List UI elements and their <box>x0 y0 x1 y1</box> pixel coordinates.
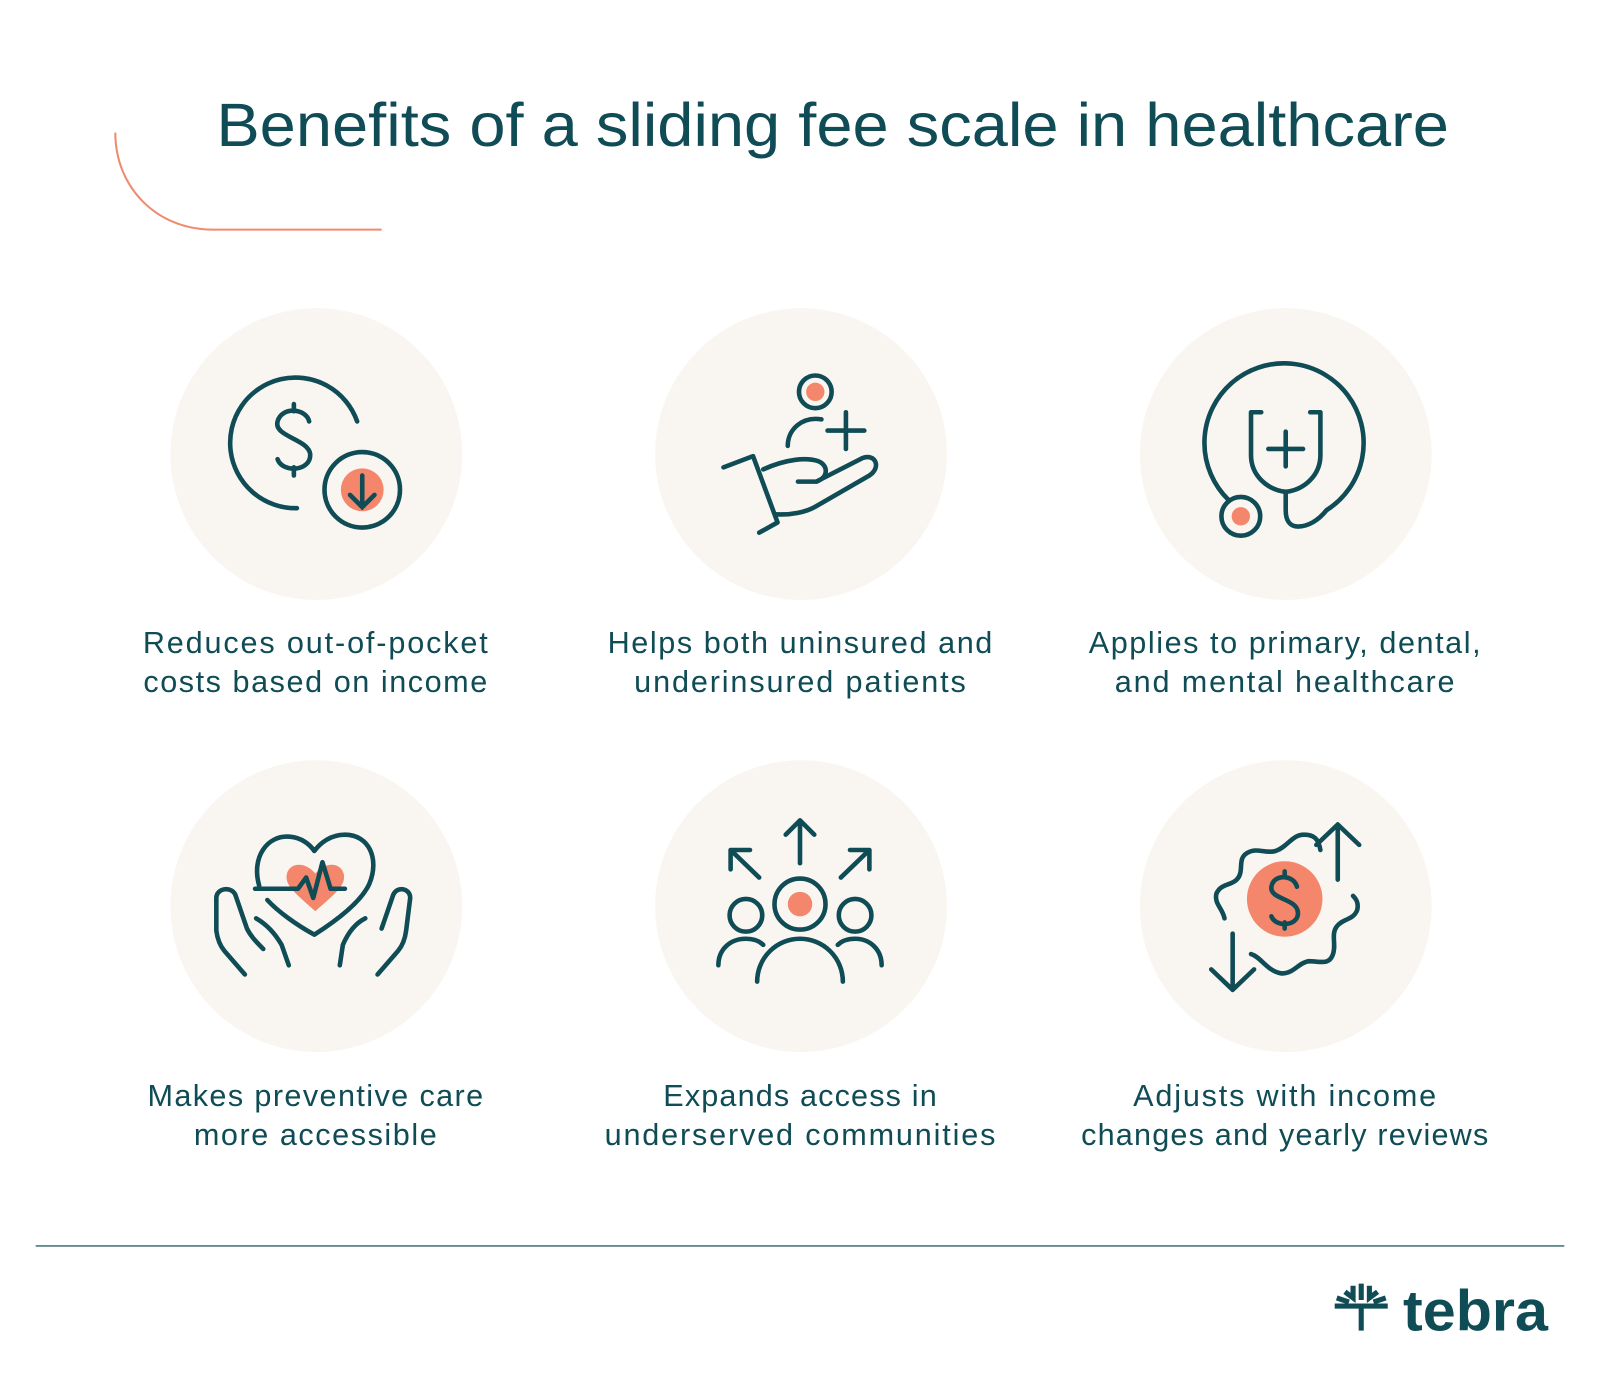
text: underserved communities <box>605 1118 995 1152</box>
panel: expands access <box>605 760 995 1152</box>
panel: adjusts with income <box>1081 760 1488 1152</box>
icon: community with arrows <box>718 820 882 982</box>
icon: gear dollar with arrows <box>1211 824 1359 990</box>
text: Reduces out-of-pocket <box>143 626 488 660</box>
title: Benefits of a sliding fee scale in healthcare <box>216 91 1449 159</box>
panel: preventive care <box>147 760 483 1152</box>
icon: hand with person plus <box>723 376 876 533</box>
text: Makes preventive care <box>147 1079 483 1113</box>
panel: applies to care types <box>1089 308 1481 699</box>
divider <box>36 1245 1564 1247</box>
text: and mental healthcare <box>1115 665 1455 699</box>
logo: tebra <box>1335 1280 1549 1344</box>
icon: dollar coin with down arrow <box>230 378 400 528</box>
panel: reduces costs <box>143 308 488 699</box>
text: more accessible <box>194 1118 437 1152</box>
icon: tebra sprig <box>1335 1284 1388 1331</box>
text: Applies to primary, dental, <box>1089 626 1481 660</box>
icon: heart in hands <box>216 835 410 974</box>
decorative orange arc <box>115 133 382 230</box>
text: Expands access in <box>663 1079 937 1113</box>
panel: helps uninsured <box>608 308 992 699</box>
text: underinsured patients <box>634 665 966 699</box>
text: costs based on income <box>143 665 487 699</box>
text: Adjusts with income <box>1133 1079 1436 1113</box>
icon: stethoscope shield <box>1204 363 1364 536</box>
text: Helps both uninsured and <box>608 626 992 660</box>
text: changes and yearly reviews <box>1081 1118 1488 1152</box>
logo: tebra: tebra <box>1403 1280 1549 1344</box>
